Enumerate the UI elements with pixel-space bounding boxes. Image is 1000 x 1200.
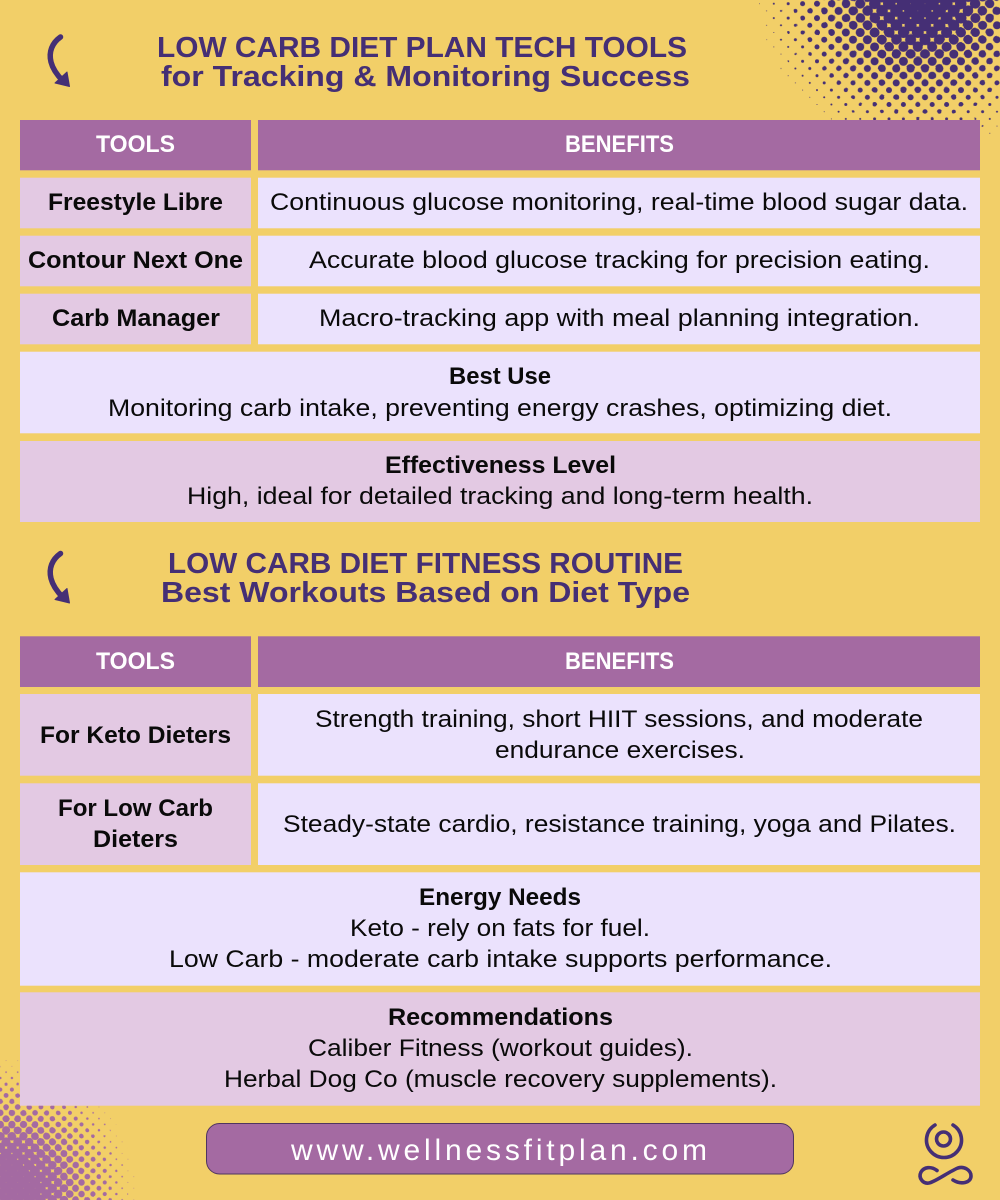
title: tech tools: LOW CARB DIET PLAN TECH TOOLS xyxy=(157,32,687,64)
table header: BENEFITS xyxy=(565,648,674,675)
row: Contour Next One: Contour Next One xyxy=(28,247,243,274)
table header: TOOLS xyxy=(96,648,175,675)
title: tech tools: for Tracking & Monitoring Success xyxy=(161,61,690,93)
title: fitness routine: Best Workouts Based on Diet Type xyxy=(161,577,690,609)
row: Recommendations: Herbal Dog Co (muscle recovery supplements). xyxy=(224,1066,777,1093)
website button xyxy=(206,1124,794,1174)
icon: curved arrow, second section xyxy=(50,554,70,603)
row: Recommendations: Recommendations xyxy=(388,1004,613,1031)
row: Best Use xyxy=(20,352,980,433)
table header: TOOLS xyxy=(96,131,175,158)
row: Carb Manager: Carb Manager xyxy=(52,305,220,332)
halftone: top right xyxy=(759,0,1000,151)
row: Energy Needs: Keto - rely on fats for fuel. xyxy=(350,915,650,942)
table header: BENEFITS xyxy=(565,131,674,158)
row: Freestyle Libre: Continuous glucose monitoring, real-time blood sugar data. xyxy=(270,189,968,216)
title: tech tools xyxy=(157,32,690,93)
icon: curved arrow, first section xyxy=(50,37,70,86)
row: Recommendations: Caliber Fitness (workout guides). xyxy=(308,1035,693,1062)
row: Contour Next One: Accurate blood glucose tracking for precision eating. xyxy=(309,247,930,274)
table header xyxy=(20,120,980,170)
icon: meditation logo xyxy=(920,1125,971,1183)
row: Carb Manager xyxy=(20,294,980,344)
row: For Keto Dieters xyxy=(20,694,980,776)
row: Best Use: Monitoring carb intake, preventing energy crashes, optimizing diet. xyxy=(108,395,892,422)
row: Effectiveness Level: High, ideal for detailed tracking and long-term health. xyxy=(187,483,813,510)
panel: tech tools table xyxy=(20,120,980,522)
row: For Keto Dieters: Strength training, short HIIT sessions, and moderate xyxy=(315,706,923,733)
row: For Low Carb Dieters: For Low Carb xyxy=(58,795,213,822)
row: Effectiveness Level xyxy=(20,441,980,522)
website button: www.wellnessfitplan.com xyxy=(290,1134,707,1167)
table header xyxy=(20,636,980,687)
row: Energy Needs: Energy Needs xyxy=(419,884,581,911)
row: Freestyle Libre xyxy=(20,178,980,228)
row: Effectiveness Level: Effectiveness Level xyxy=(385,452,616,479)
row: Recommendations xyxy=(20,992,980,1106)
row: For Low Carb Dieters: Dieters xyxy=(93,826,178,853)
title: fitness routine xyxy=(161,548,690,609)
row: Contour Next One xyxy=(20,236,980,286)
row: For Low Carb Dieters: Steady-state cardio, resistance training, yoga and Pilates. xyxy=(283,811,956,838)
row: Energy Needs xyxy=(20,872,980,986)
row: For Low Carb Dieters xyxy=(20,783,980,865)
panel: fitness routine table xyxy=(20,636,980,1106)
halftone: bottom left xyxy=(0,1059,136,1200)
row: For Keto Dieters: For Keto Dieters xyxy=(40,722,231,749)
row: For Keto Dieters: endurance exercises. xyxy=(495,737,745,764)
row: Carb Manager: Macro-tracking app with meal planning integration. xyxy=(319,305,920,332)
title: fitness routine: LOW CARB DIET FITNESS ROUTINE xyxy=(168,548,683,580)
row: Energy Needs: Low Carb - moderate carb intake supports performance. xyxy=(169,946,832,973)
row: Best Use: Best Use xyxy=(449,363,551,390)
row: Freestyle Libre: Freestyle Libre xyxy=(48,189,223,216)
